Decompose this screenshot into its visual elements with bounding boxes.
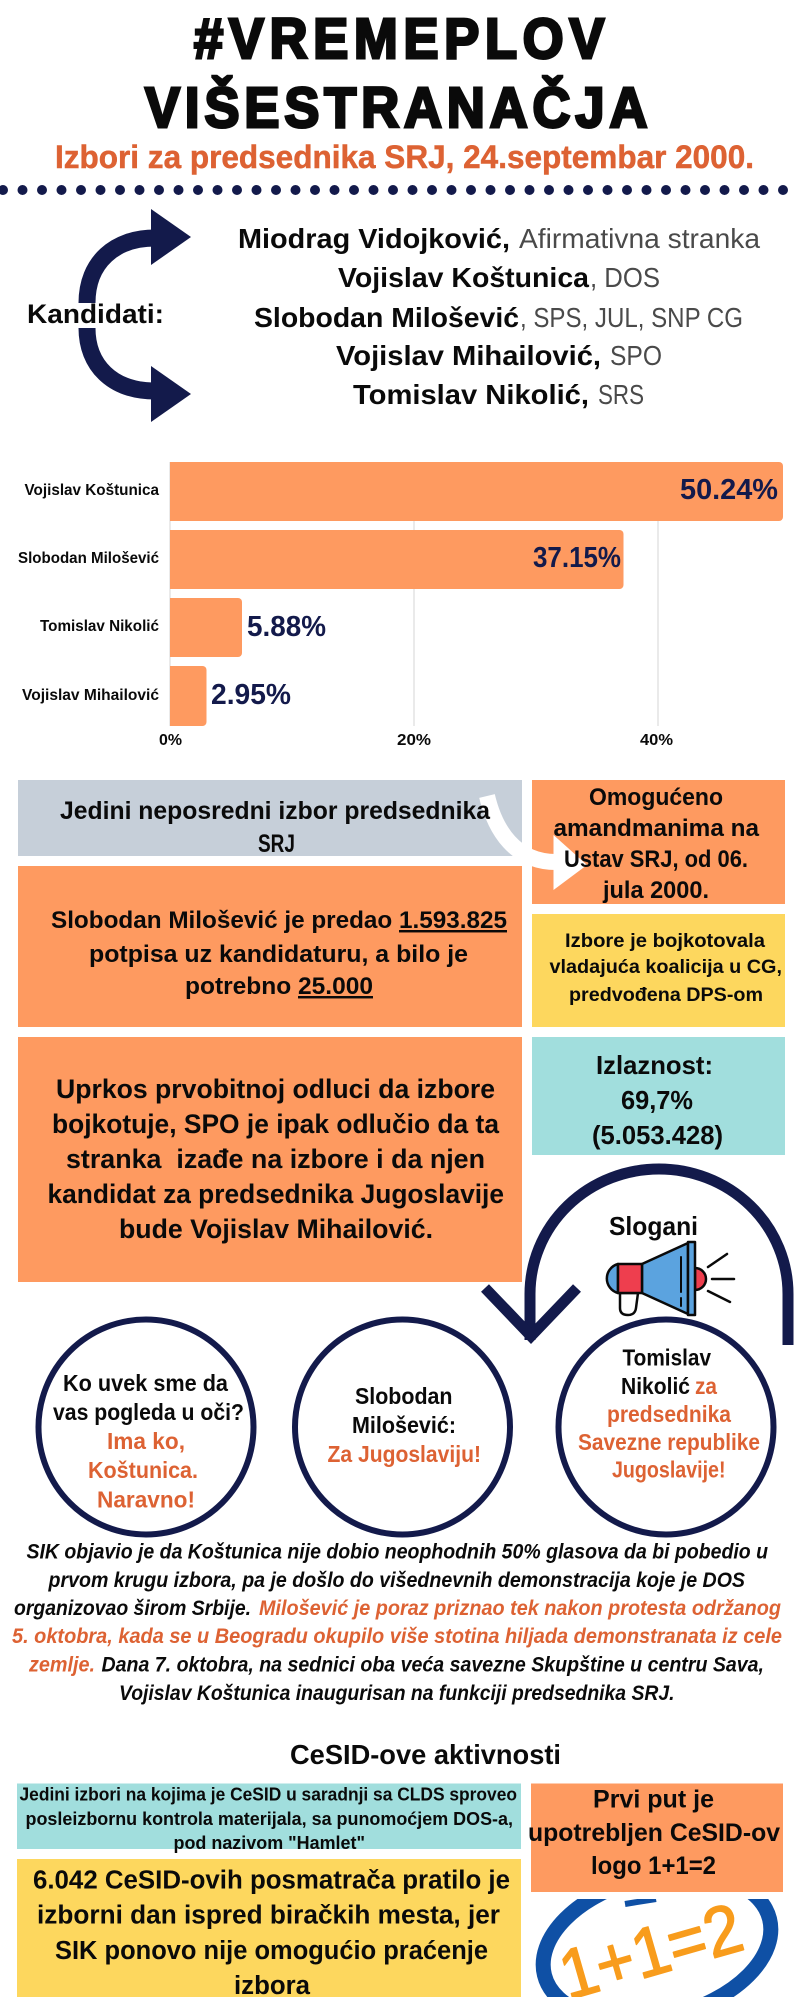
panel: observers: SIK ponovo nije omogućio praćenje xyxy=(55,1937,488,1965)
heading: Slogani: Slogani xyxy=(609,1211,698,1241)
slogan circle: Nikolić: Savezne republike xyxy=(578,1429,760,1455)
panel: boycott xyxy=(532,914,785,1027)
candidate: Milošević: Slobodan Milošević xyxy=(254,302,519,333)
panel: orange amendment box xyxy=(532,780,785,904)
slogan circle: Nikolić: Jugoslavije! xyxy=(612,1456,726,1482)
candidate: Mihailović: SPO xyxy=(610,340,662,371)
title: #VREMEPLOV xyxy=(194,6,605,70)
bar values: 37.15% xyxy=(533,542,621,574)
bar names xyxy=(18,482,159,704)
arrow: lower candidates arrow xyxy=(87,328,191,422)
text block: aftermath paragraph: zemlje. xyxy=(28,1654,95,1676)
panel: Hamlet: Jedini izbori na kojima je CeSID u saradnji sa CLDS sproveo xyxy=(20,1785,517,1805)
text block: aftermath paragraph: Vojislav Koštunica inaugurisan na funkciji predsednika SRJ. xyxy=(119,1682,674,1705)
axis labels xyxy=(159,732,673,749)
panel: signatures: Slobodan Milošević je predao 1.593.825 xyxy=(51,907,507,934)
slogan circle: Milošević xyxy=(295,1320,510,1534)
subtitle: Izbori za predsednika SRJ, 24.septembar 2000. xyxy=(55,139,754,175)
slogan circle: Koštunica xyxy=(38,1320,254,1534)
slogan circle: Nikolić xyxy=(558,1320,774,1534)
panel: boycott: predvođena DPS-om xyxy=(569,985,763,1006)
slogan circle: Nikolić: za xyxy=(695,1373,717,1399)
bar values: 50.24% xyxy=(680,474,778,506)
bar values: 5.88% xyxy=(247,611,326,643)
candidate: Mihailović: Vojislav Mihailović, xyxy=(336,340,601,371)
label: Kandidati: Kandidati: xyxy=(27,299,164,329)
panel: signatures: potpisa uz kandidaturu, a bilo je xyxy=(89,941,468,968)
panel: SPO decision: Uprkos prvobitnoj odluci da izbore xyxy=(56,1074,495,1104)
slogan circle: Koštunica: Koštunica. xyxy=(88,1457,198,1483)
text block: aftermath paragraph: organizovao širom Srbije. xyxy=(14,1597,251,1620)
panel: boycott: Izbore je bojkotovala xyxy=(565,931,765,952)
panel: signatures: potrebno 25.000 xyxy=(185,973,373,1000)
slogan circle: Milošević: Slobodan xyxy=(355,1383,452,1409)
panel: Hamlet: pod nazivom "Hamlet" xyxy=(174,1833,365,1853)
text: amendments: Omogućeno xyxy=(589,784,723,811)
bar chart xyxy=(18,462,783,749)
candidate: Vidojković xyxy=(238,223,761,254)
panel: first logo use: upotrebljen CeSID-ov xyxy=(528,1819,780,1847)
panel: SPO decision: bude Vojislav Mihailović. xyxy=(119,1214,433,1244)
panel: signatures xyxy=(18,866,522,1027)
bar names: Slobodan Milošević xyxy=(18,550,159,567)
candidate: Vidojković: Afirmativna stranka xyxy=(519,223,761,254)
panel: SPO decision: kandidat za predsednika Jugoslavije xyxy=(48,1179,504,1209)
panel: turnout: 69,7% xyxy=(621,1085,693,1115)
panel: first logo use xyxy=(528,1784,783,1892)
bar values: 2.95% xyxy=(211,679,291,711)
panel: Hamlet xyxy=(17,1784,521,1853)
text: amendments: Ustav SRJ, od 06. xyxy=(564,846,748,873)
candidate: Nikolić: SRS xyxy=(598,379,644,410)
candidate: Koštunica: Vojislav Koštunica xyxy=(338,262,590,293)
panel: boycott: vladajuća koalicija u CG, xyxy=(550,957,782,978)
candidate: Vidojković: Miodrag Vidojković, xyxy=(238,223,510,254)
panel: gray box xyxy=(18,780,522,856)
panel: first logo use: logo 1+1=2 xyxy=(591,1852,716,1880)
panel: SPO decision xyxy=(18,1037,522,1282)
panel: SPO decision: stranka izađe na izbore i da njen xyxy=(66,1144,485,1174)
panel: observers: izborni dan ispred biračkih mesta, jer xyxy=(37,1902,500,1930)
axis labels: 40% xyxy=(640,732,673,749)
text: amendments: jula 2000. xyxy=(602,877,709,904)
text: amendments: amandmanima na xyxy=(554,815,759,842)
panel: observers xyxy=(17,1859,521,2000)
panel: first logo use: Prvi put je xyxy=(593,1786,714,1814)
heading: CeSID activities: CeSID-ove aktivnosti xyxy=(290,1739,561,1770)
arrow: big slogans arc xyxy=(485,1169,788,1345)
slogan circle: Milošević: Milošević: xyxy=(352,1412,456,1438)
bar values xyxy=(211,474,778,711)
slogan circle: Koštunica: Naravno! xyxy=(97,1486,195,1512)
text block: aftermath paragraph: 5. oktobra, kada se u Beogradu okupilo više stotina hiljada demonstranata iz cele xyxy=(12,1625,782,1648)
panel: observers: 6.042 CeSID-ovih posmatrača pratilo je xyxy=(33,1866,510,1894)
text: direct election xyxy=(60,797,491,858)
arrow: white curved arrow xyxy=(487,796,587,890)
bar names: Vojislav Mihailović xyxy=(22,687,159,704)
slogan circle: Nikolić: Tomislav xyxy=(622,1344,711,1370)
text block: aftermath paragraph: Dana 7. oktobra, na sednici oba veća savezne Skupštine u centru Sava, xyxy=(102,1654,764,1676)
slogan circle: Koštunica: Ko uvek sme da xyxy=(63,1370,228,1396)
slogan circle: Nikolić: predsednika xyxy=(607,1401,731,1427)
panel: SPO decision: bojkotuje, SPO je ipak odlučio da ta xyxy=(52,1109,499,1139)
text: direct election: SRJ xyxy=(258,830,295,858)
slogan circle: Koštunica: vas pogleda u oči? xyxy=(53,1399,244,1425)
panel: turnout: (5.053.428) xyxy=(592,1120,723,1150)
bars xyxy=(170,462,783,726)
text block: aftermath paragraph xyxy=(12,1540,782,1705)
slogan circle: Koštunica: Ima ko, xyxy=(107,1428,185,1454)
title xyxy=(145,6,647,139)
text: direct election: Jedini neposredni izbor predsednika xyxy=(60,797,491,825)
bar names: Vojislav Koštunica xyxy=(24,482,159,499)
candidate: Koštunica: , DOS xyxy=(590,262,660,293)
panel: turnout xyxy=(532,1037,785,1155)
candidate: Milošević: , SPS, JUL, SNP CG xyxy=(520,302,743,333)
panel: Hamlet: posleizbornu kontrola materijala, sa punomoćjem DOS-a, xyxy=(26,1809,513,1829)
panel: observers: izbora xyxy=(234,1972,311,2000)
text: amendments xyxy=(554,784,759,904)
icon: megaphone xyxy=(607,1242,734,1315)
arrow: upper candidates arrow xyxy=(87,209,191,303)
text block: aftermath paragraph: prvom krugu izbora, pa je došlo do višednevnih demonstracija koje je DOS xyxy=(48,1569,745,1592)
title: VIŠESTRANAČJA xyxy=(145,75,647,139)
candidate: Milošević xyxy=(254,302,743,333)
slogan circle: Nikolić: Nikolić xyxy=(621,1373,690,1399)
axis labels: 0% xyxy=(159,732,182,749)
candidate list xyxy=(238,223,761,410)
candidate: Nikolić: Tomislav Nikolić, xyxy=(353,379,589,410)
axis labels: 20% xyxy=(397,732,431,749)
bar names: Tomislav Nikolić xyxy=(40,618,159,635)
text block: aftermath paragraph: Milošević je poraz priznao tek nakon protesta održanog xyxy=(259,1597,781,1620)
slogan circle: Milošević: Za Jugoslaviju! xyxy=(328,1441,481,1467)
panel: turnout: Izlaznost: xyxy=(596,1050,713,1080)
